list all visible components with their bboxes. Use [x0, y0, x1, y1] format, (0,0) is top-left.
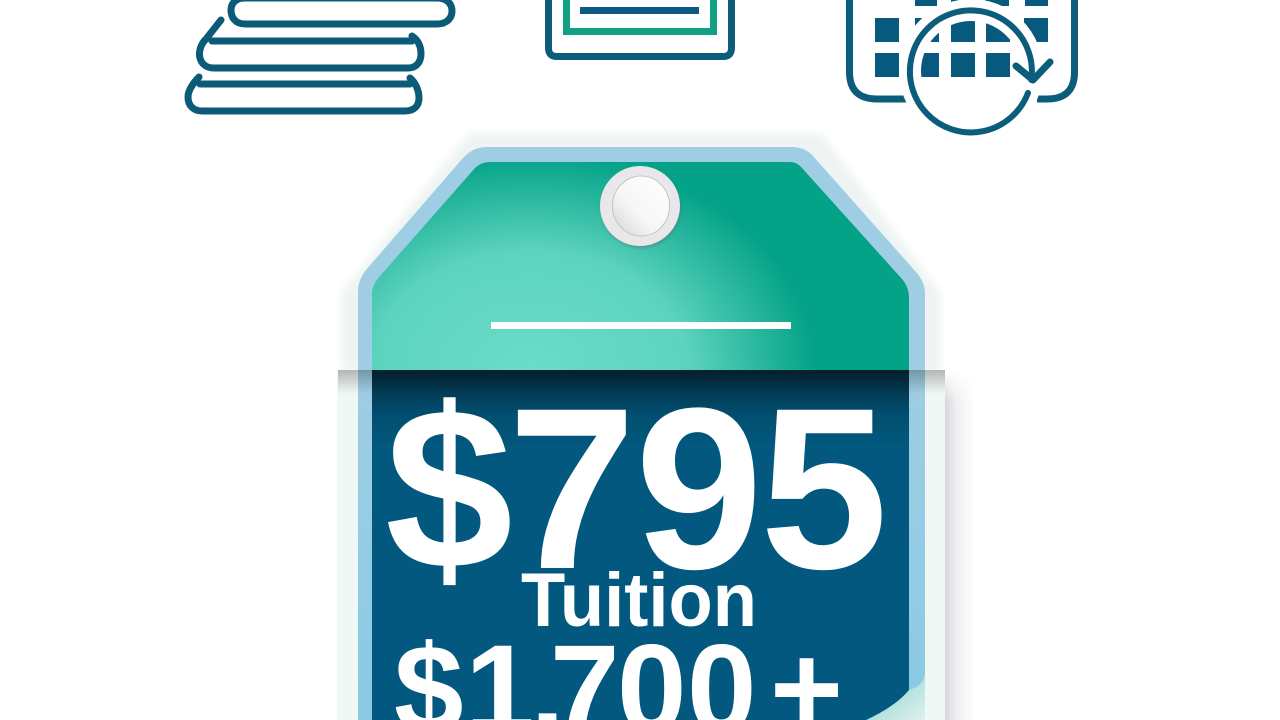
icon: calendar with cycle arrow: [850, 0, 1074, 132]
tag light blue border: [358, 147, 925, 720]
icon: certificate: [548, 0, 732, 56]
price tag: [337, 134, 975, 720]
price: $795: $795: [385, 360, 888, 617]
tag green top panel: [372, 162, 909, 370]
tag navy lower panel: [372, 370, 909, 720]
eyelet: [600, 166, 681, 248]
curled corner: [866, 672, 925, 720]
fold shadow: [338, 370, 945, 394]
icon: stack of books: [188, 0, 452, 111]
white label line: [491, 322, 791, 329]
tag halo and shadow: [337, 134, 975, 720]
label: Tuition: Tuition: [521, 558, 757, 643]
